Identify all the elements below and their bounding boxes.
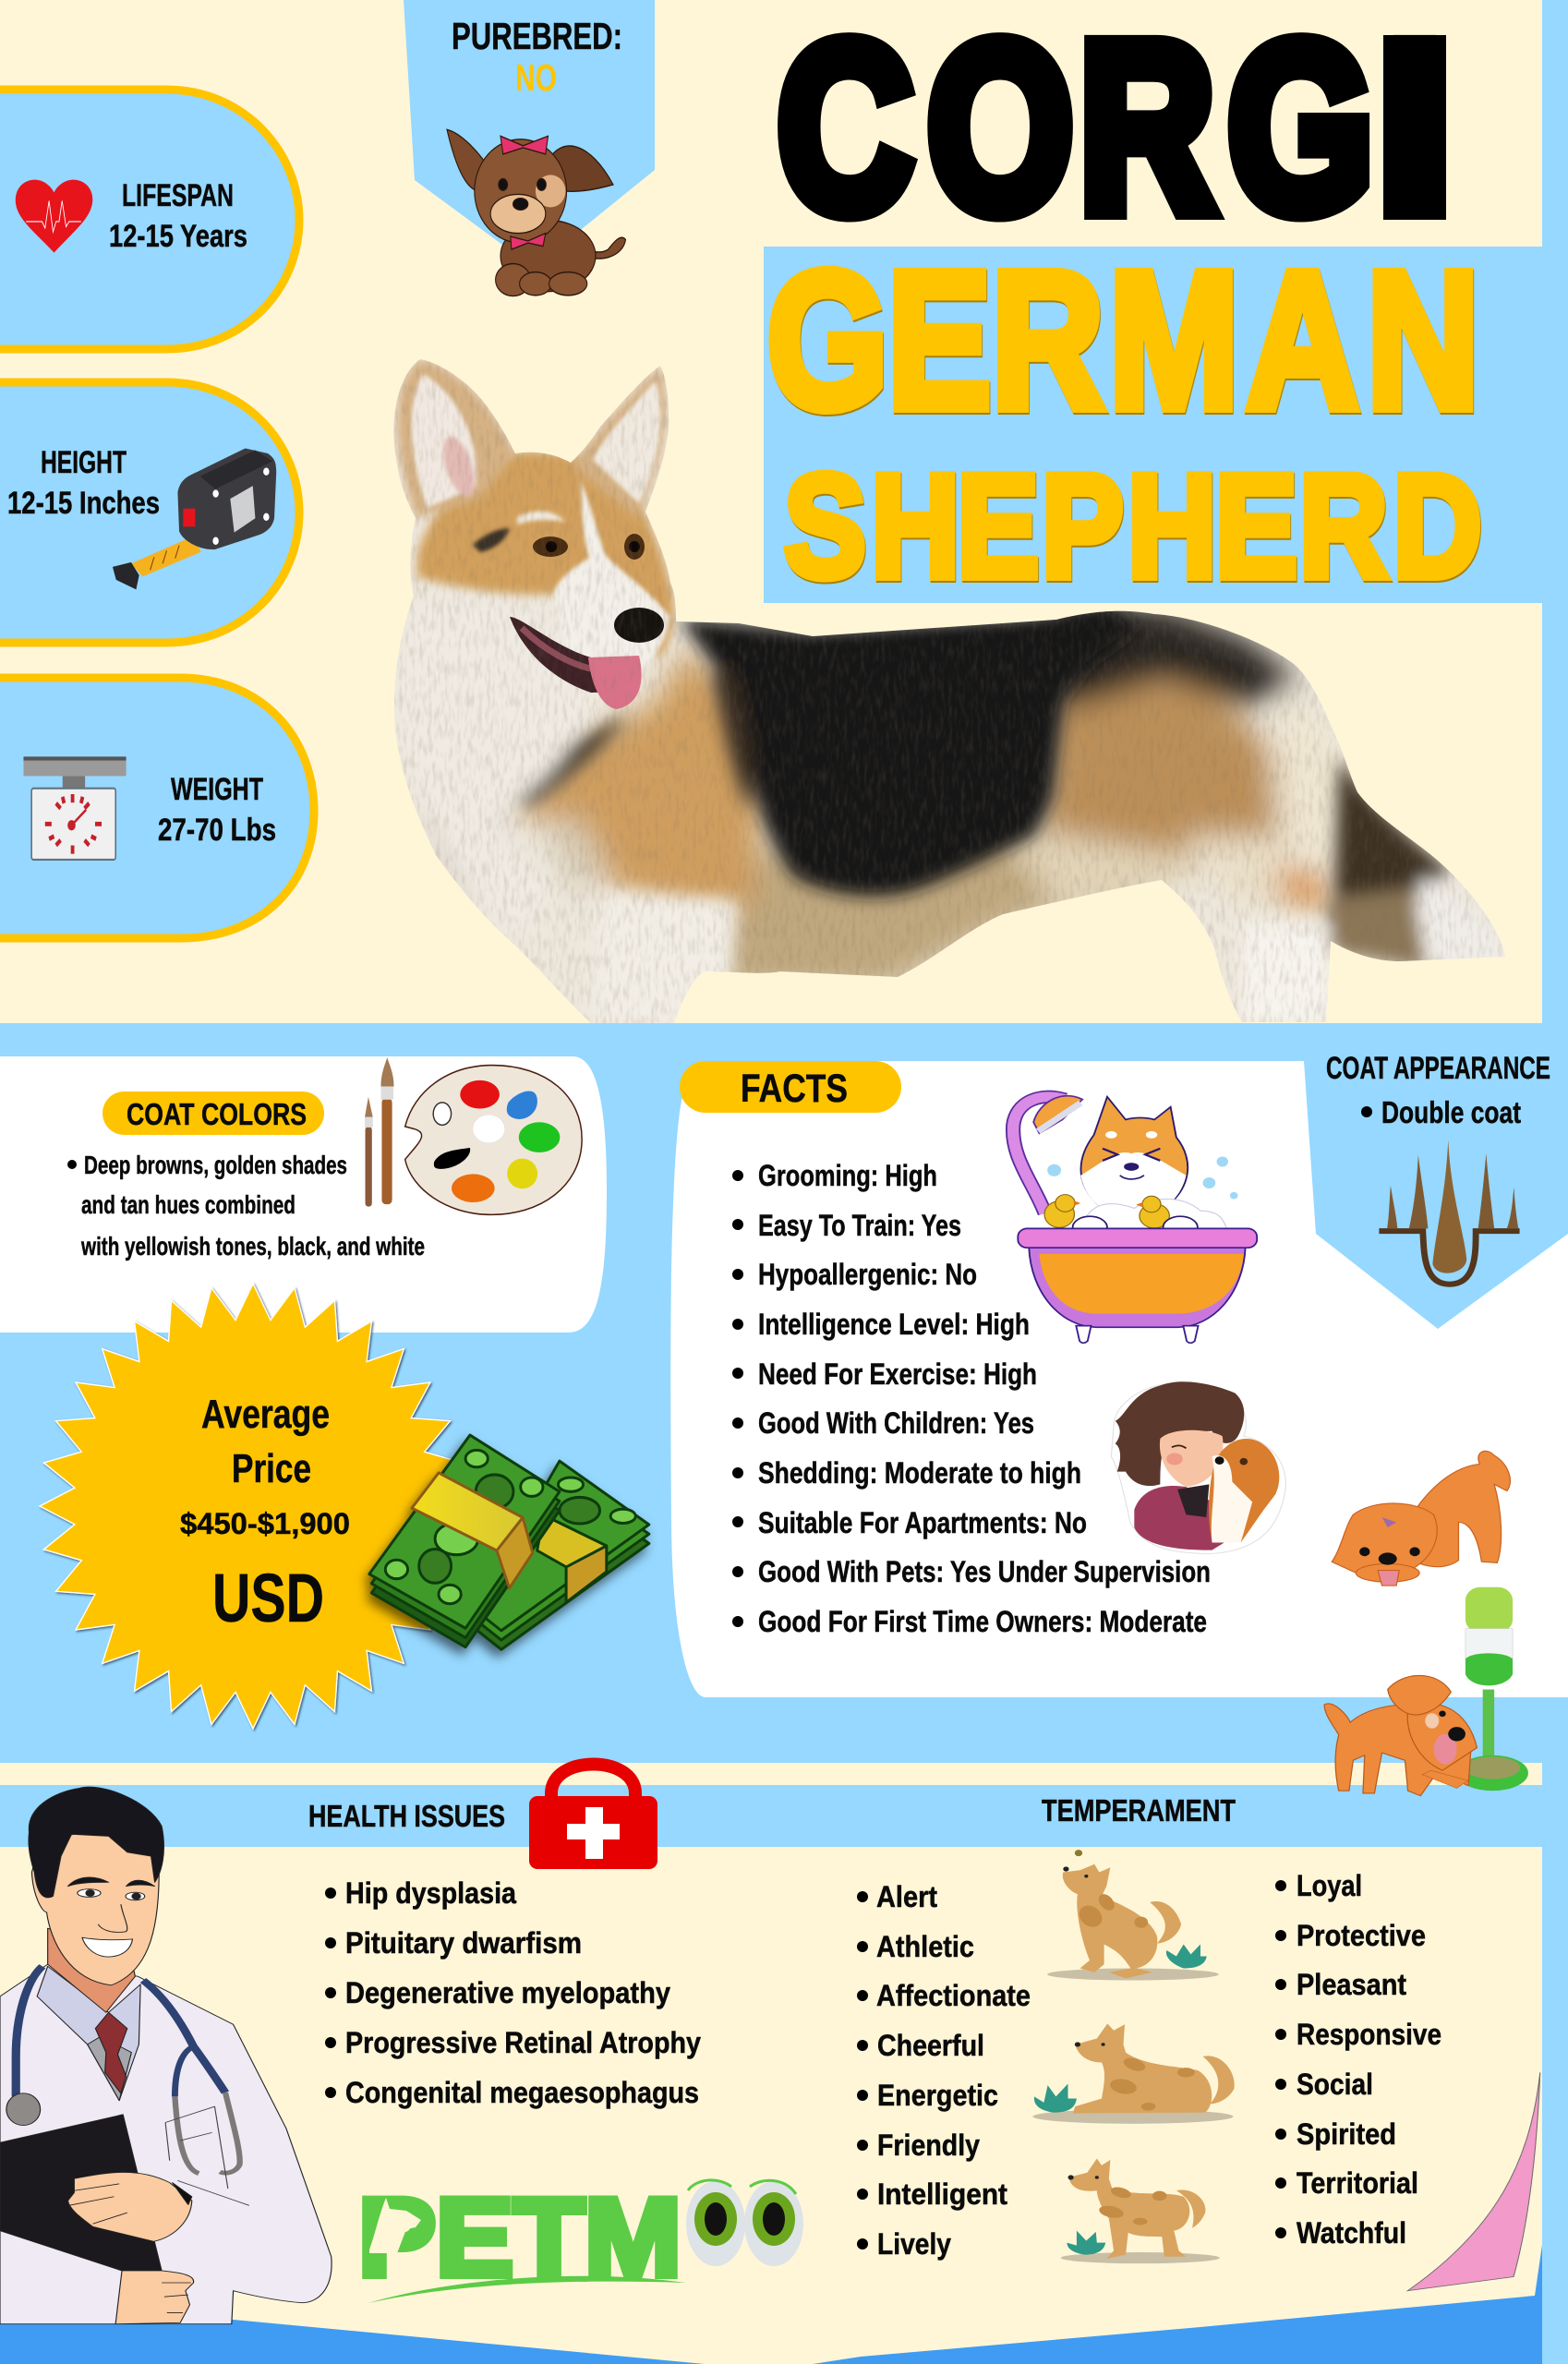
text: height label: HEIGHT (41, 445, 127, 480)
water bottle stand (1457, 1587, 1528, 1791)
list: temperament right: Social (1297, 2068, 1373, 2101)
ears (397, 359, 515, 518)
heading: purebred: PUREBRED: (452, 15, 622, 57)
list: temperament right: Watchful (1297, 2216, 1406, 2249)
puppy (1324, 1704, 1471, 1796)
text: average: Average (201, 1392, 330, 1437)
clipboard (0, 2115, 162, 2271)
icon: red first aid kit (529, 1764, 657, 1869)
text block: coat color description: Deep browns, golden shades (84, 1151, 347, 1179)
list: health issues: Pituitary dwarfism (345, 1926, 582, 1960)
icon: hair follicle (1379, 1140, 1520, 1285)
logo dog silhouette (369, 2198, 421, 2253)
heading: temperament: TEMPERAMENT (1042, 1793, 1236, 1827)
upper hand (67, 2172, 192, 2241)
list: temperament left: Lively (877, 2227, 951, 2261)
list: temperament left: Cheerful (877, 2029, 984, 2062)
text: double coat: Double coat (1381, 1095, 1521, 1129)
dark rump top (1053, 605, 1302, 711)
icon: playful orange puppy (1332, 1451, 1510, 1586)
eyes and brows (67, 1877, 155, 1887)
cream paper (0, 1847, 1542, 2364)
text: usd: USD (212, 1560, 324, 1636)
logo eyes (686, 2180, 803, 2266)
title word: CORGI: CORGI (778, 0, 1441, 261)
black saddle (679, 605, 1140, 896)
panel: health and temperament section (0, 1763, 1542, 2364)
nose (614, 608, 664, 643)
list: facts (732, 1159, 1211, 1638)
lower hand (115, 2271, 194, 2324)
icon: shiba dog in bathtub (1013, 1096, 1257, 1343)
logo swoosh (368, 2276, 686, 2303)
rump tan (1043, 683, 1293, 859)
icon: paint palette and brushes (365, 1057, 582, 1214)
list: temperament left (857, 1880, 1031, 2261)
shoulder streak (506, 716, 628, 808)
value: no: NO (515, 56, 557, 99)
list: temperament right: Spirited (1297, 2117, 1396, 2151)
list: temperament right: Territorial (1297, 2166, 1418, 2200)
white patch near foreleg (591, 891, 739, 1025)
heading: health issues: HEALTH ISSUES (308, 1799, 505, 1833)
list: temperament right (1275, 1869, 1441, 2249)
list: facts: Good For First Time Owners: Moderate (758, 1605, 1207, 1638)
panel: lifespan (0, 90, 299, 349)
list: facts: Need For Exercise: High (758, 1357, 1037, 1391)
blue header band (0, 1785, 1542, 1847)
text: price range: $450-$1,900 (180, 1507, 350, 1540)
list: temperament left: Intelligent (877, 2177, 1007, 2211)
list: facts: Hypoallergenic: No (758, 1258, 977, 1291)
panel: coat colors (0, 1056, 607, 1333)
list: facts: Easy To Train: Yes (758, 1209, 961, 1242)
list: temperament left: Affectionate (876, 1979, 1031, 2012)
icon: orange puppy at feeder (1324, 1587, 1528, 1796)
torn paper: lower right (813, 2245, 1542, 2364)
cream band (0, 1763, 1542, 1785)
panel: hero cream section (0, 0, 1542, 1023)
panel: weight (0, 678, 314, 938)
tongue (588, 656, 642, 709)
head tan (417, 452, 674, 660)
badge: average price starburst (40, 1284, 466, 1729)
list: health issues: Hip dysplasia (345, 1876, 516, 1910)
shirt and tie (37, 1966, 140, 2101)
text: lifespan value: 12-15 Years (109, 219, 247, 254)
list: health issues: Congenital megaesophagus (345, 2076, 699, 2109)
title word: GERMAN: GERMAN (766, 232, 1479, 449)
panel: title background blue block (764, 247, 1542, 603)
fur texture (369, 351, 1533, 1025)
white cheeks and throat (427, 711, 608, 903)
list: facts: Suitable For Apartments: No (758, 1506, 1087, 1539)
panel: facts (670, 1061, 1568, 1697)
list: temperament left: Athletic (876, 1930, 974, 1963)
list: health issues: Progressive Retinal Atrophy (345, 2026, 701, 2059)
coat (0, 1964, 332, 2324)
logo wordmark: PETM (358, 2176, 681, 2299)
text: height value: 12-15 Inches (7, 486, 160, 521)
text block: coat color description: with yellowish tones, black, and white (80, 1232, 425, 1260)
hind leg (1242, 923, 1330, 1025)
title (766, 0, 1481, 608)
heading text: facts: FACTS (741, 1067, 848, 1111)
list: health issues: Degenerative myelopathy (345, 1976, 670, 2009)
heading text: coat colors: COAT COLORS (127, 1097, 307, 1131)
nose and smile (98, 1904, 127, 1932)
list: facts: Intelligence Level: High (758, 1308, 1030, 1341)
shoulder tan (517, 646, 762, 910)
list: temperament right: Responsive (1297, 2018, 1441, 2051)
eyes (533, 537, 568, 557)
list: temperament left: Friendly (877, 2129, 980, 2162)
icon: standing tan dog (1061, 2159, 1220, 2263)
hair (29, 1787, 163, 1898)
icon: lying tan dog (1032, 2023, 1235, 2124)
logo: petmoo (358, 2176, 803, 2303)
text: lifespan label: LIFESPAN (122, 178, 234, 213)
page curl (1407, 2072, 1540, 2291)
list: temperament left: Energetic (877, 2079, 998, 2112)
icon: weighing scale (23, 756, 127, 860)
muzzle blaze (554, 480, 669, 681)
torn paper: lower left (0, 2320, 705, 2364)
icon: sitting tan dog (1047, 1850, 1219, 1981)
stethoscope (16, 1966, 42, 2096)
heading pill: coat colors (103, 1092, 324, 1135)
tail (1334, 757, 1450, 910)
list: temperament left: Alert (876, 1880, 937, 1913)
icon: cartoon puppy (447, 129, 626, 296)
list: health issues (325, 1876, 701, 2109)
chest shadow (434, 838, 462, 883)
panel: coat appearance (1304, 1051, 1568, 1329)
text block: coat color description (67, 1151, 425, 1260)
illustration: doctor (0, 1787, 332, 2324)
list: facts: Good With Children: Yes (758, 1406, 1034, 1440)
list: temperament right: Protective (1297, 1919, 1426, 1952)
icon: stacks of money (369, 1435, 649, 1649)
heading pill: facts (680, 1061, 901, 1113)
text block: coat color description: and tan hues combined (81, 1190, 296, 1219)
list: facts: Shedding: Moderate to high (758, 1456, 1081, 1490)
list: facts: Good With Pets: Yes Under Supervision (758, 1555, 1211, 1588)
icon: tape measure (113, 448, 276, 589)
title word: SHEPHERD: SHEPHERD (784, 444, 1481, 608)
mouth (510, 617, 598, 693)
icon: heart with ecg (16, 180, 92, 253)
underbelly (718, 819, 1143, 977)
panel: purebred banner (404, 0, 655, 296)
eye smudge (473, 528, 510, 552)
text: weight value: 27-70 Lbs (158, 813, 276, 848)
pocket (165, 2106, 249, 2205)
text: price: Price (232, 1446, 311, 1491)
panel: height (0, 382, 299, 643)
pale hind flank (1270, 688, 1357, 886)
face and neck (48, 1928, 135, 2012)
list: temperament right: Loyal (1297, 1869, 1362, 1902)
list: temperament right: Pleasant (1297, 1968, 1406, 2001)
main image: corgi german shepherd dog (369, 351, 1533, 1025)
text: weight label: WEIGHT (171, 772, 263, 807)
list: facts: Grooming: High (758, 1159, 937, 1192)
icon: woman hugging dog (1111, 1381, 1285, 1554)
